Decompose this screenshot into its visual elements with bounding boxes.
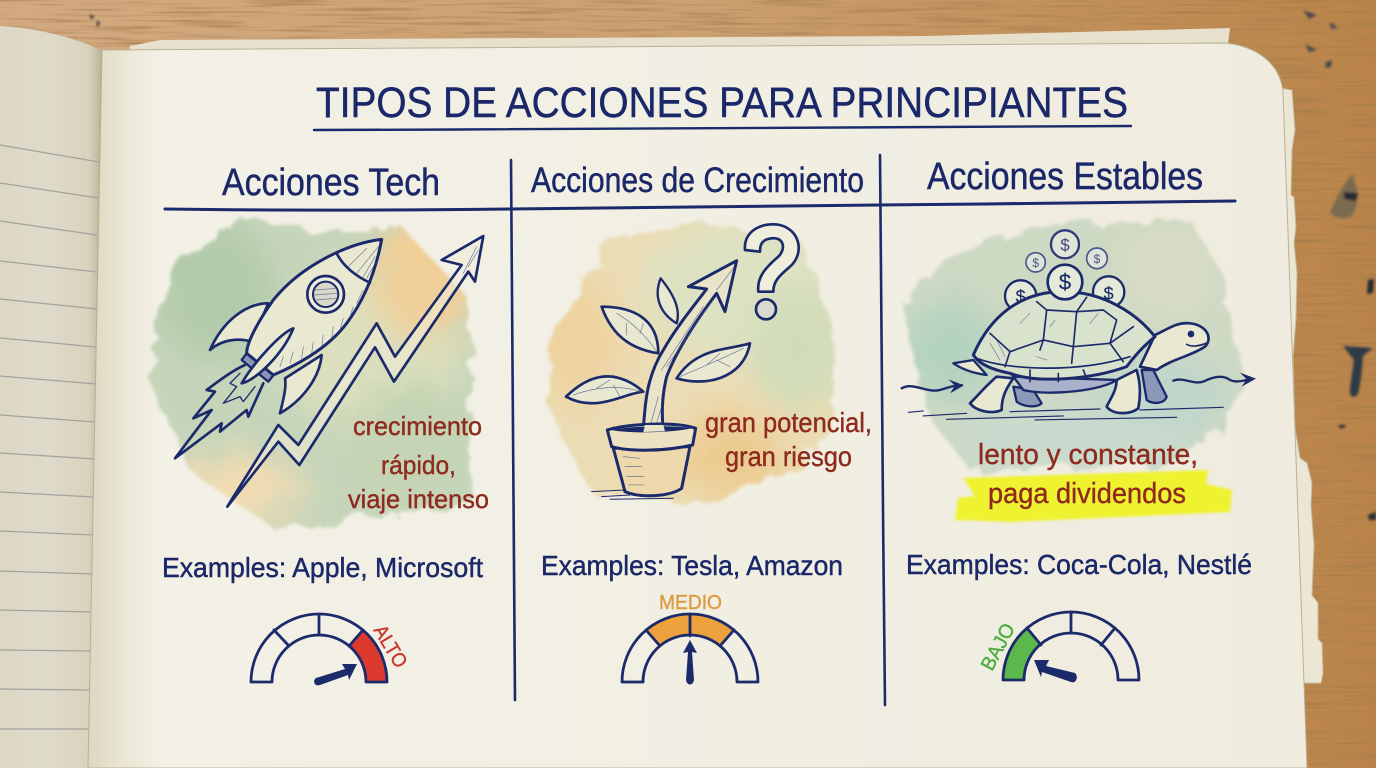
- center coin on shell: $: [1059, 269, 1071, 294]
- gauge: medio risk: MEDIO: [659, 592, 722, 614]
- wavy arrow left: [902, 379, 964, 393]
- underbelly: [1013, 377, 1117, 393]
- right fin: [280, 355, 322, 413]
- question mark: [745, 224, 799, 319]
- left fin: [210, 303, 268, 350]
- leaf: top small: [658, 278, 678, 323]
- examples: growth: Examples: Tesla, Amazon: [541, 550, 843, 581]
- ground lines: [908, 407, 1223, 420]
- caption: crecimiento rápido: rápido,: [381, 450, 456, 480]
- gauge: bajo risk: BAJO: [977, 620, 1020, 674]
- caption: lento y constante: lento y constante,: [978, 439, 1198, 471]
- caption: lento y constante: paga dividendos: [988, 478, 1186, 510]
- torn paper edges on the right: [1280, 88, 1323, 683]
- gauge: alto risk: [251, 614, 411, 685]
- shell: [973, 292, 1155, 382]
- leaf: right: [677, 343, 750, 382]
- coins behind shell: $: [1032, 256, 1039, 270]
- coins behind shell: $: [1104, 283, 1114, 303]
- column heading: Acciones de Crecimiento: Acciones de Crecimiento: [531, 161, 864, 200]
- caption: gran potencial: gran riesgo: [725, 441, 852, 472]
- watercolor wash: panel 3: [890, 210, 1250, 480]
- left notebook page: [0, 26, 101, 768]
- caption: gran potencial: gran potencial,: [705, 407, 872, 438]
- neck and head: [1140, 323, 1209, 370]
- column heading: Acciones Tech: Acciones Tech: [222, 162, 440, 204]
- nose cone: [337, 253, 370, 283]
- caption: crecimiento rápido: [348, 411, 489, 514]
- caption: crecimiento rápido: crecimiento: [353, 411, 482, 441]
- rising zigzag arrow: [227, 236, 483, 507]
- icon: turtle with coins: [902, 230, 1256, 420]
- watercolor wash: panel 2: [544, 219, 836, 506]
- coins behind shell: $: [1060, 236, 1070, 255]
- porthole: [307, 276, 344, 313]
- pot: [592, 424, 696, 499]
- caption: lento y constante: [978, 439, 1198, 510]
- caption: crecimiento rápido: viaje intenso: [348, 484, 489, 514]
- yellow highlighter: [955, 470, 1232, 522]
- leaf: lower left: [566, 376, 643, 403]
- nozzle: [242, 353, 275, 382]
- tail: [953, 360, 987, 375]
- coins behind shell: $: [1094, 252, 1101, 266]
- gauge: medio risk: [622, 592, 758, 684]
- column heading: Acciones Estables: Acciones Estables: [927, 156, 1203, 198]
- stem arrow: [643, 261, 737, 430]
- wavy arrow right: [1173, 373, 1256, 387]
- body hatching: [280, 290, 363, 367]
- examples: stable: Examples: Coca-Cola, Nestlé: [906, 549, 1252, 580]
- table rule lines: [165, 155, 1235, 705]
- gauge: bajo risk: [977, 612, 1139, 682]
- watercolor wash: panel 1: [146, 216, 478, 531]
- front legs: [970, 370, 1140, 413]
- coins behind shell: $: [1016, 287, 1026, 307]
- icon: rocket and rising arrow: [175, 236, 483, 507]
- icon: plant with arrow and question mark: [566, 224, 799, 499]
- center coin on shell: [1048, 265, 1082, 299]
- middle fin: [242, 328, 293, 383]
- back legs: [1013, 370, 1167, 406]
- title: TIPOS DE ACCIONES PARA PRINCIPIANTES: [316, 79, 1128, 127]
- gauge: alto risk: ALTO: [369, 621, 411, 672]
- shell scutes: [977, 297, 1133, 382]
- rocket body: [247, 239, 382, 375]
- coins behind shell: [1005, 230, 1124, 312]
- flames: [175, 365, 263, 458]
- ruled lines: [0, 145, 99, 729]
- examples: tech: Examples: Apple, Microsoft: [162, 552, 483, 583]
- caption: gran potencial: [705, 407, 872, 472]
- leaf: upper left: [602, 307, 658, 353]
